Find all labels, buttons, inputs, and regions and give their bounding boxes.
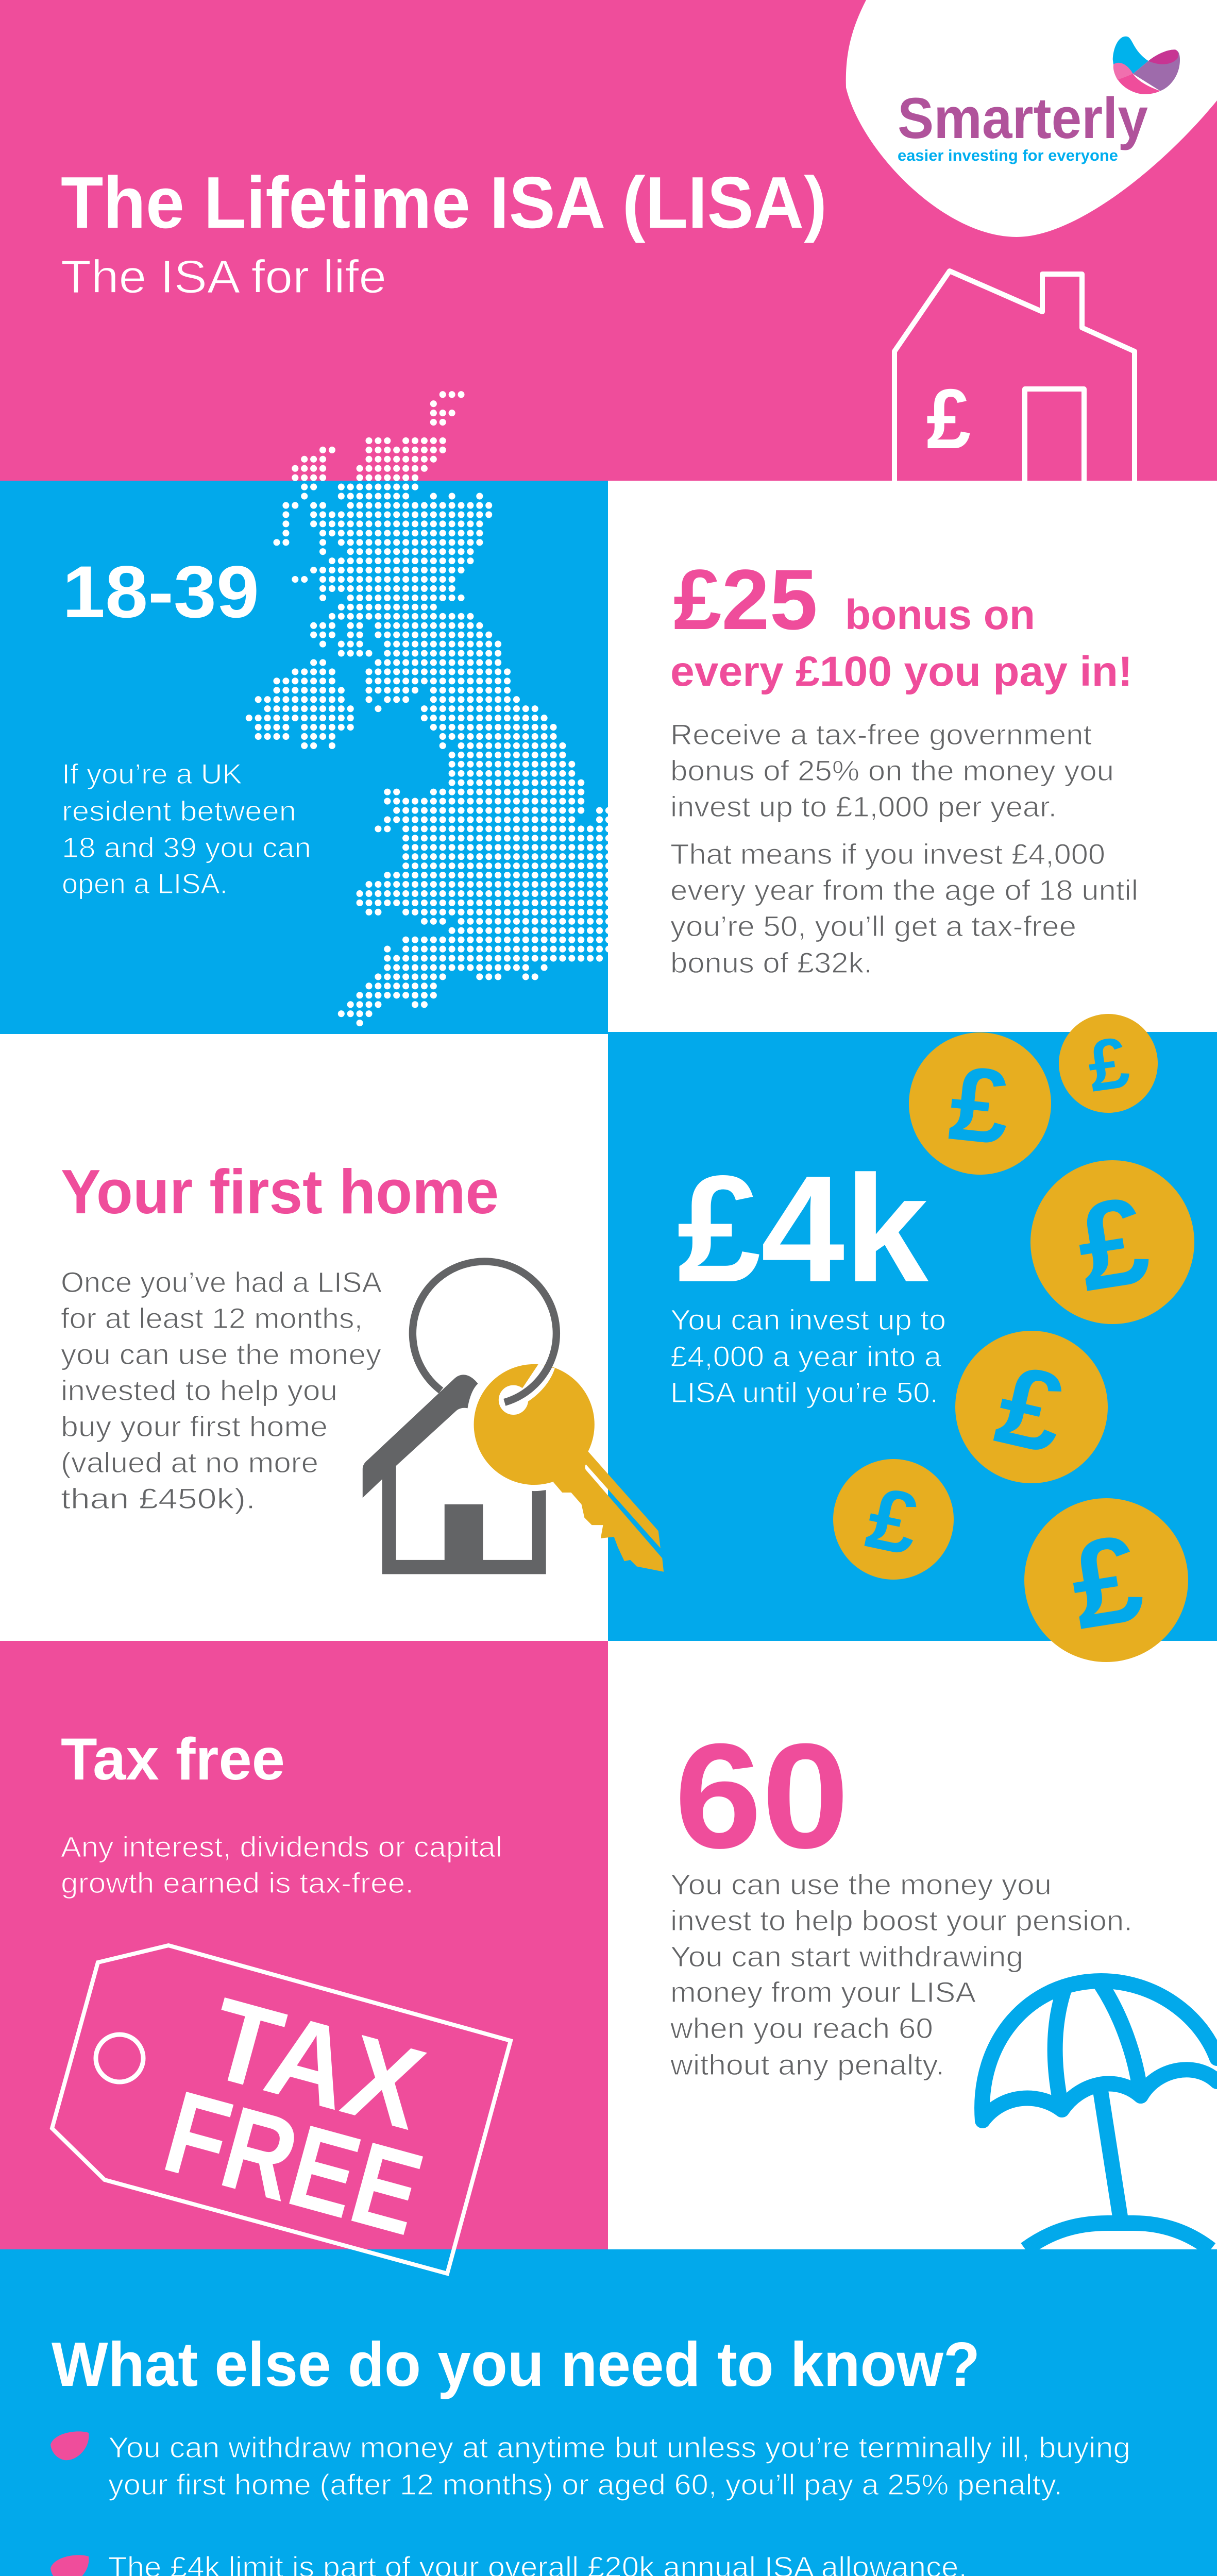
logo blob [846,0,1217,237]
4k heading: £4k [677,1144,929,1314]
pension text: invest to help boost your pension. [670,1904,1133,1937]
icon: tax free tag [52,1945,511,2274]
bullet 1: your first home (after 12 months) or aged 60, you’ll pay a 25% penalty. [108,2468,1062,2501]
tax free text: growth earned is tax-free. [61,1867,414,1899]
coin 6 [1024,1498,1188,1662]
first home heading: Your first home [61,1157,499,1227]
4k text [670,1303,946,1409]
first home text: you can use the money [61,1338,381,1370]
bullet 1: You can withdraw money at anytime but unless you’re terminally ill, buying [108,2431,1130,2464]
4k text: £4,000 a year into a [670,1340,942,1372]
icon: coins [833,1014,1194,1662]
icon: house keyring [363,1261,664,1574]
coin 5: £ [859,1468,927,1574]
bonus text: That means if you invest £4,000 [670,838,1105,870]
4k text: You can invest up to [670,1303,946,1336]
panel: bonus [608,481,1217,1032]
coin 1 [909,1032,1051,1175]
coin 1: £ [944,1044,1015,1167]
pension text: money from your LISA [670,1976,976,2008]
panel: first home [0,1034,608,1641]
icon: beach umbrella [982,1981,1217,2249]
tax free heading: Tax free [61,1726,285,1792]
bonus heading: bonus on [845,591,1035,638]
bonus text: every year from the age of 18 until [670,874,1138,906]
first home text: buy your first home [61,1410,328,1443]
icon: house outline [894,271,1135,481]
tax free text [61,1831,502,1899]
first home text: than £450k). [61,1482,256,1515]
bonus text [670,718,1138,979]
pension text: You can start withdrawing [670,1940,1023,1973]
first home text: (valued at no more [61,1446,318,1479]
tax free text: Any interest, dividends or capital [61,1831,502,1863]
first home text: Once you’ve had a LISA [61,1266,382,1298]
panel: what else do you need to know [0,2249,1217,2576]
panel: 4k limit [608,1032,1217,1641]
pension text: You can use the money you [670,1868,1052,1901]
panel: header [0,0,1217,481]
60 heading: 60 [674,1713,849,1879]
bonus heading: every £100 you pay in! [670,648,1133,695]
bonus text: invest up to £1,000 per year. [670,790,1057,823]
coin 5 [833,1459,954,1580]
icon: house [363,1375,546,1574]
title: The Lifetime ISA (LISA) [61,162,827,244]
first home text: for at least 12 months, [61,1302,363,1334]
logo icon [1113,37,1180,94]
coin 6: £ [1062,1508,1151,1655]
age text: 18 and 39 you can [62,832,311,863]
coin 4 [955,1331,1108,1483]
dotted UK map [249,395,609,1023]
4k text: LISA until you’re 50. [670,1376,938,1409]
age text [62,758,311,900]
coin 3: £ [1068,1170,1157,1317]
icon: key [474,1364,664,1572]
key white hole [514,1364,555,1408]
bonus heading: £25 [673,552,818,648]
section heading: What else do you need to know? [52,2329,980,2399]
bonus text: bonus of £32k. [670,946,872,979]
panel: pension 60 [608,1641,1217,2249]
bonus heading [670,552,1133,695]
age text: If you’re a UK [62,758,242,790]
coin 3 [1030,1160,1194,1324]
tag hole [96,2035,143,2082]
age text: open a LISA. [62,868,228,900]
panel: tax free [0,1641,608,2249]
bonus text: you’re 50, you’ll get a tax-free [670,910,1076,942]
icon: key ring [413,1261,556,1402]
tag word: free: FREE [152,2066,435,2260]
pension text: when you reach 60 [670,2012,933,2044]
age range heading: 18-39 [62,551,259,633]
pension text: without any penalty. [670,2048,944,2081]
logo wordmark: Smarterly [898,86,1148,150]
white gap around key [468,1358,601,1491]
coin 4: £ [986,1340,1076,1478]
bonus text: bonus of 25% on the money you [670,754,1114,787]
panel: age 18-39 [0,481,608,1034]
first home text: invested to help you [61,1374,337,1406]
subtitle: The ISA for life [61,251,386,303]
coin 2 [1059,1014,1158,1113]
first home text [61,1266,382,1515]
tag word: tax: TAX [196,1973,437,2154]
icon: pound sign: £ [926,371,971,466]
logo tagline: easier investing for everyone [898,146,1118,164]
age text: resident between [62,795,296,827]
bullet 1 [50,2431,1130,2501]
coin 2: £ [1083,1021,1134,1107]
bonus text: Receive a tax-free government [670,718,1092,751]
pension text [670,1868,1133,2081]
